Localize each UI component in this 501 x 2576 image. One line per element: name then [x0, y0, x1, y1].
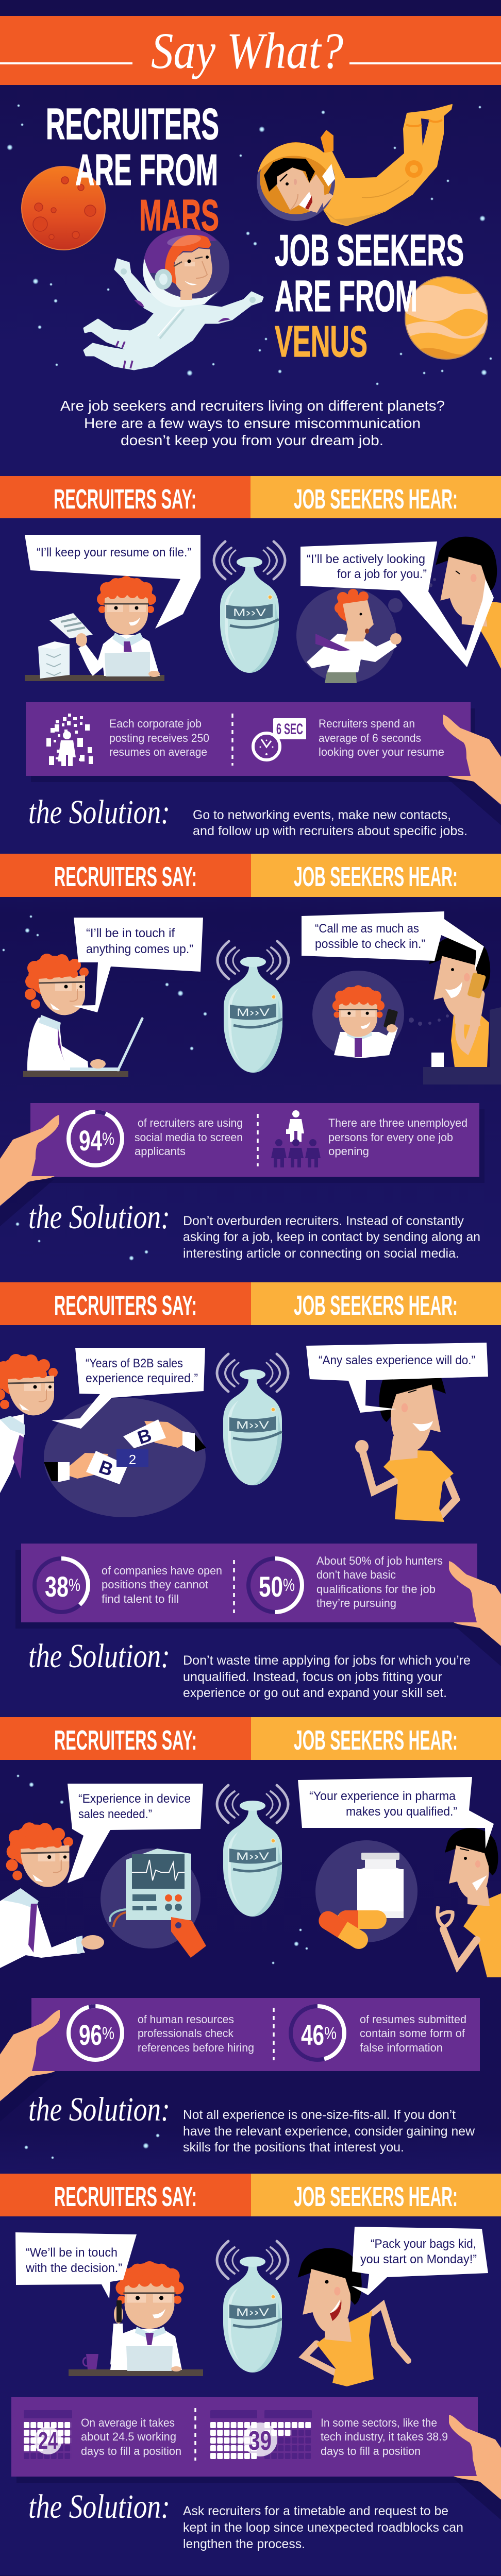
communicator device: M››V — [236, 1851, 269, 1862]
speech bubble: job seeker hears: for a job for you.” — [337, 567, 427, 581]
communicator device — [217, 1354, 288, 1485]
communicator device — [217, 1785, 288, 1917]
hand holding panel 4 — [0, 2010, 60, 2126]
planet: Mars — [22, 166, 105, 250]
stat panel 5: In some sectors, like the — [321, 2416, 437, 2429]
title banner: Say What? — [0, 16, 501, 85]
stat panel 5: about 24.5 working — [81, 2430, 176, 2443]
solution 2: Don’t overburden recruiters. Instead of constantly — [183, 1214, 464, 1228]
stat panel 2: applicants — [135, 1145, 186, 1158]
section 4 header band: RECRUITERS SAY: — [54, 1725, 197, 1756]
solution 4: the Solution: — [28, 2091, 170, 2128]
planet: Venus — [405, 277, 488, 364]
intro text: doesn’t keep you from your dream job. — [121, 432, 383, 448]
speech bubble: job seeker hears: possible to check in.” — [315, 937, 425, 951]
solution 5: Ask recruiters for a timetable and request to be — [183, 2504, 448, 2518]
section 3 header band — [0, 1282, 501, 1325]
speech bubble: recruiter says — [72, 918, 203, 1012]
job seeker excited — [298, 2248, 408, 2386]
stat panel 1: average of 6 seconds — [319, 732, 421, 744]
speech bubble: job seeker hears: you start on Monday!” — [360, 2252, 477, 2266]
circle: B2B business card handshake: 2 — [129, 1452, 136, 1467]
solution 4: Not all experience is one-size-fits-all. If you don’t — [183, 2108, 456, 2122]
speech bubble: recruiter says — [15, 2232, 137, 2299]
solution 1: and follow up with recruiters about specific jobs. — [193, 824, 467, 838]
stat panel 3 — [15, 1544, 477, 1629]
intro text: Are job seekers and recruiters living on different planets? — [60, 398, 445, 414]
heading: job seekers are from Venus: VENUS — [275, 317, 368, 366]
section 3 header band: RECRUITERS SAY: — [54, 1290, 197, 1321]
speech bubble: recruiter says: experience required.” — [86, 1371, 198, 1385]
donut: 38% — [35, 1558, 88, 1612]
speech bubble: recruiter says: sales needed.” — [78, 1807, 152, 1821]
stat panel 3: qualifications for the job — [316, 1583, 436, 1596]
solution 3: the Solution: — [28, 1637, 170, 1675]
speech bubble: job seeker hears: “I’ll be actively looking — [307, 552, 425, 566]
job seeker on phone — [409, 936, 501, 1084]
speech bubble: job seeker hears: makes you qualified.” — [346, 1805, 457, 1819]
section 5 header band — [0, 2174, 501, 2216]
stat panel 2: persons for every one job — [328, 1131, 453, 1144]
job seeker waving — [355, 1363, 456, 1522]
communicator device: M››V — [233, 607, 266, 619]
stat panel 2: of recruiters are using — [138, 1116, 243, 1129]
thought bubble: recruiter on phone — [312, 971, 404, 1058]
recruiter, left edge — [0, 1354, 58, 1493]
stat panel 5: On average it takes — [81, 2416, 175, 2429]
icon: crowd of resumes — [46, 714, 93, 766]
stat panel 1: posting receives 250 — [109, 732, 209, 744]
speech bubble: job seeker hears: “Pack your bags kid, — [371, 2237, 476, 2251]
speech bubble: recruiter says: “I’ll keep your resume on file.” — [37, 546, 191, 560]
donut: 46%: 46 — [301, 2019, 324, 2051]
astronaut: job seeker in yellow suit — [257, 105, 452, 226]
speech bubble: job seeker hears: “Any sales experience will do.” — [319, 1353, 475, 1367]
solution 3: experience or go out and expand your skill set. — [183, 1686, 447, 1700]
solution 2: the Solution: — [28, 1198, 170, 1236]
solution 2: asking for a job, keep in contact by sending along an — [183, 1230, 480, 1244]
speech bubble: recruiter says: “We’ll be in touch — [26, 2246, 118, 2260]
speech bubble: recruiter says — [25, 535, 201, 629]
communicator device: M››V — [237, 1007, 270, 1019]
section 1 header band — [0, 476, 501, 518]
stat panel 3: don’t have basic — [316, 1568, 396, 1581]
stat panel 4: professionals check — [138, 2027, 234, 2040]
calendar: 39 days — [210, 2410, 312, 2461]
stat panel 2: social media to screen — [135, 1131, 243, 1144]
speech bubble: job seeker hears — [298, 1777, 494, 1849]
speech bubble: job seeker hears — [352, 2227, 488, 2295]
title banner: Say What?: Say What? — [151, 22, 343, 79]
speech bubble: recruiter says: anything comes up.” — [86, 942, 193, 956]
heading: recruiters are from Mars: RECRUITERS — [46, 100, 219, 149]
hand holding panel 5 — [449, 2415, 501, 2531]
intro text: Here are a few ways to ensure miscommunication — [84, 415, 421, 431]
icon: one employed person and three unemployed — [271, 1110, 321, 1167]
stat panel 5 — [11, 2397, 478, 2483]
calendar: 24 days: 24 — [38, 2427, 58, 2454]
stat panel 3: they’re pursuing — [316, 1597, 396, 1609]
speech bubble: job seeker hears: “Your experience in pharma — [309, 1789, 456, 1803]
thought bubble: recruiter running with thumbs up — [296, 578, 436, 683]
recruiter on phone at desk — [69, 2261, 203, 2376]
solution 3: Don’t waste time applying for jobs for which you’re — [183, 1653, 471, 1668]
speech bubble: job seeker hears — [302, 911, 484, 972]
section 1 header band: RECRUITERS SAY: — [54, 484, 196, 515]
solution 4 — [28, 2091, 475, 2155]
circle: B2B business card handshake: B — [96, 1456, 116, 1480]
speech bubble: recruiter says — [52, 1348, 205, 1429]
section 2 header band: RECRUITERS SAY: — [54, 861, 197, 892]
stat panel 4: contain some form of — [360, 2027, 465, 2040]
stat panel 4: references before hiring — [138, 2041, 254, 2054]
stat panel 1 — [26, 702, 475, 782]
solution 3 — [28, 1637, 471, 1700]
stat panel 2: There are three unemployed — [328, 1116, 467, 1129]
solution 2 — [28, 1198, 480, 1261]
donut: 38%: % — [69, 1575, 80, 1595]
stat panel 3: find talent to fill — [102, 1592, 179, 1605]
speech bubble: recruiter says — [68, 1784, 203, 1883]
icon: clock with 6 SEC tag: 6 SEC — [276, 721, 303, 738]
job seeker okay sign — [438, 1828, 501, 1977]
stat panel 1: Recruiters spend an — [319, 717, 415, 730]
stat panel 2: opening — [328, 1145, 369, 1158]
solution 1: Go to networking events, make new contacts, — [193, 808, 451, 822]
recruiter at laptop — [23, 954, 142, 1077]
donut: 46% — [291, 2006, 344, 2060]
stat panel 5: days to fill a position — [81, 2445, 181, 2458]
circle: B2B business card handshake — [44, 1398, 206, 1517]
section 4 header band — [0, 1717, 501, 1760]
stat panel 3: positions they cannot — [102, 1578, 208, 1591]
donut: 94%: 94 — [79, 1124, 102, 1157]
stat panel 1: Each corporate job — [109, 717, 202, 730]
solution 4: skills for the positions that interest you. — [183, 2140, 404, 2155]
circle: medical monitor with price tag — [101, 1849, 206, 1958]
astronaut: recruiter in white suit — [84, 228, 263, 369]
solution 5: lengthen the process. — [183, 2537, 305, 2551]
stat panel 4: of resumes submitted — [360, 2013, 466, 2026]
calendar: 39 days: 39 — [248, 2426, 272, 2456]
communicator device — [214, 541, 285, 673]
speech bubble: recruiter says: “Years of B2B sales — [86, 1357, 183, 1370]
heading: recruiters are from Mars: MARS — [139, 191, 219, 240]
solution 5: the Solution: — [28, 2488, 170, 2526]
stat panel 5: days to fill a position — [321, 2445, 421, 2458]
heading: job seekers are from Venus — [275, 226, 464, 366]
donut: 96%: 96 — [79, 2019, 102, 2051]
calendar: 24 days — [24, 2410, 72, 2461]
donut: 46%: % — [324, 2024, 337, 2043]
stat panel 1: resumes on average — [109, 745, 207, 758]
speech bubble: recruiter says: with the decision.” — [25, 2261, 122, 2275]
stat panel 5: tech industry, it takes 38.9 — [321, 2430, 448, 2443]
speech bubble: job seeker hears — [300, 541, 494, 667]
circle: pill bottle and capsules — [315, 1840, 417, 1953]
donut: 94% — [69, 1112, 122, 1165]
donut: 96%: % — [102, 2024, 114, 2043]
stat panel 3: of companies have open — [102, 1564, 222, 1577]
circle: B2B business card handshake: B — [135, 1424, 154, 1448]
speech bubble: recruiter says: “Experience in device — [78, 1792, 191, 1806]
section 5 header band: RECRUITERS SAY: — [54, 2181, 197, 2212]
solution 3: unqualified. Instead, focus on jobs fitting your — [183, 1670, 442, 1684]
solution 4: have the relevant experience, consider gaining new — [183, 2124, 475, 2139]
heading: recruiters are from Mars — [46, 100, 219, 240]
donut: 50%: 50 — [259, 1570, 283, 1603]
heading: recruiters are from Mars: ARE FROM — [75, 146, 218, 195]
solution 1: the Solution: — [28, 793, 170, 831]
icon: clock with 6 SEC tag — [253, 718, 306, 760]
hand holding panel 1 — [443, 715, 501, 831]
speech bubble: job seeker hears — [306, 1343, 488, 1413]
recruiter at desk with resume — [25, 576, 164, 681]
communicator device: M››V — [236, 2307, 269, 2318]
tips banner — [0, 2575, 501, 2576]
solution 5 — [28, 2488, 463, 2551]
stat panel 3: About 50% of job hunters — [316, 1554, 443, 1567]
stat panel 2 — [30, 1103, 485, 1183]
stat panel 4: of human resources — [138, 2013, 234, 2026]
donut: 50%: % — [283, 1575, 295, 1595]
job seeker hearing — [436, 537, 501, 669]
donut: 94%: % — [102, 1129, 114, 1149]
stat panel 4: false information — [360, 2041, 443, 2054]
intro text — [60, 398, 445, 448]
recruiter pointing — [0, 1822, 104, 1968]
stat panel 4 — [31, 1998, 480, 2077]
donut: 50% — [248, 1558, 302, 1612]
stat panel 1: looking over your resume — [319, 745, 444, 758]
communicator device — [218, 941, 289, 1073]
communicator device: M››V — [236, 1419, 269, 1431]
hand holding panel 2 — [0, 1115, 59, 1231]
hand holding panel 3 — [449, 1561, 501, 1677]
solution 2: interesting article or connecting on social media. — [183, 1246, 459, 1261]
speech bubble: recruiter says: “I’ll be in touch if — [86, 926, 175, 940]
donut: 38%: 38 — [45, 1570, 69, 1603]
section 2 header band — [0, 854, 501, 897]
solution 5: kept in the loop since unexpected roadblocks can — [183, 2520, 463, 2535]
speech bubble: job seeker hears: “Call me as much as — [315, 922, 419, 936]
communicator device — [217, 2241, 288, 2372]
solution 1 — [28, 793, 467, 838]
donut: 96% — [63, 2001, 128, 2065]
